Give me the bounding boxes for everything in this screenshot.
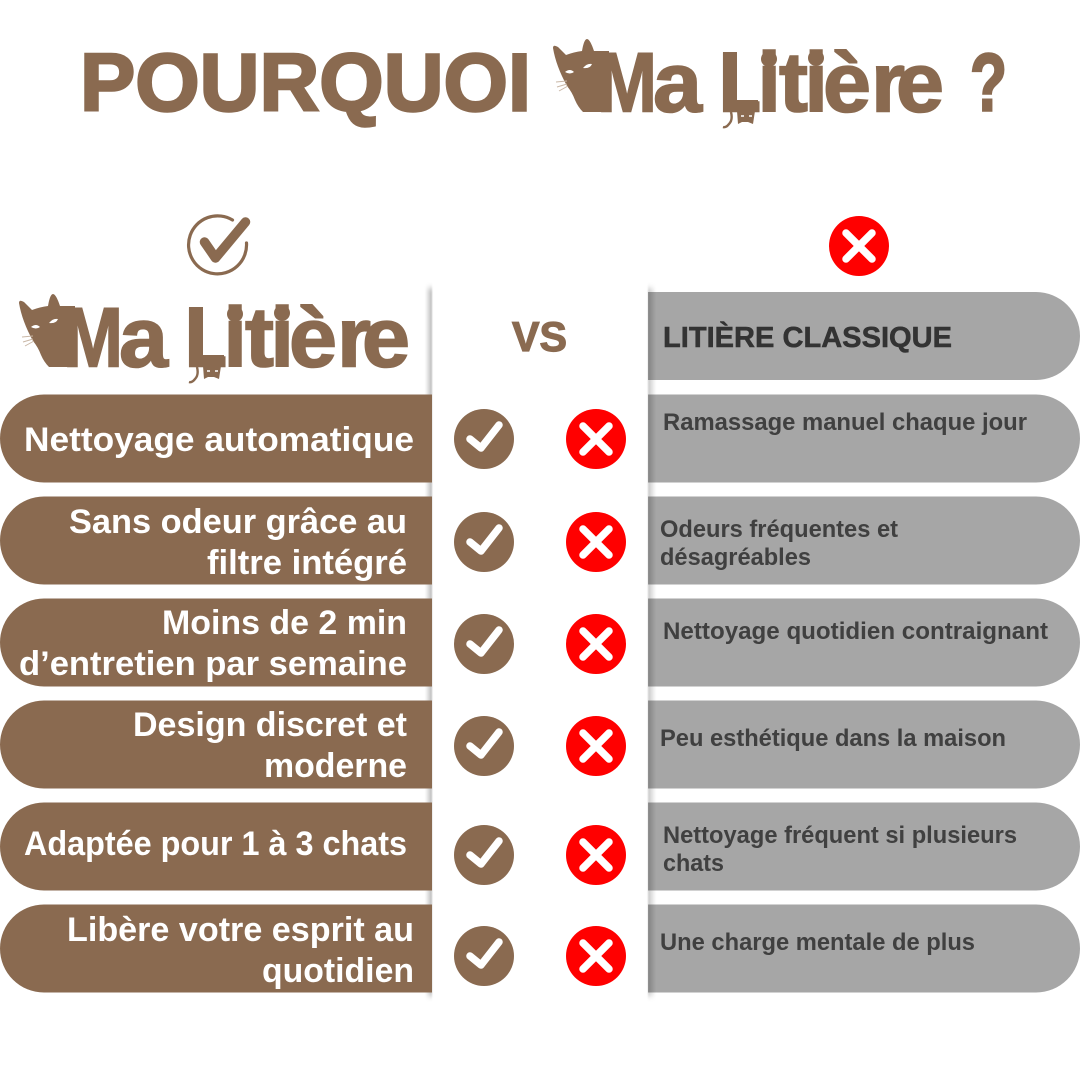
title: ?: [970, 38, 1007, 129]
panel: classic litter header: LITIÈRE CLASSIQUE: [663, 320, 952, 354]
drawback 1: [648, 394, 1080, 482]
logo: Ma Litière (column): è: [289, 290, 337, 384]
cross icon 2: [566, 512, 626, 572]
row 5: [0, 802, 1080, 890]
right column shadow: [648, 288, 656, 996]
logo: Ma Litière (column): M: [63, 290, 123, 384]
cross icon 1: [566, 409, 626, 469]
drawback 5: chats: [663, 850, 724, 877]
logo: Ma Litière (title): M: [597, 35, 657, 129]
row 3: [0, 598, 1080, 686]
advantage 3: Moins de 2 min: [162, 604, 407, 642]
advantage 4: moderne: [264, 747, 407, 785]
advantage 4: [0, 700, 432, 788]
logo: Ma Litière (column): i: [270, 290, 294, 384]
title: POURQUOI: [80, 38, 531, 129]
logo: Ma Litière (column): e: [362, 290, 410, 384]
check icon 4: [454, 716, 514, 776]
advantage 3: [0, 598, 432, 686]
panel: classic litter header: [648, 292, 1080, 380]
cross icon 3: [566, 614, 626, 674]
logo: Ma Litière (column): L: [185, 290, 227, 384]
drawback 3: Nettoyage quotidien contraignant: [663, 618, 1048, 645]
check icon 2: [454, 512, 514, 572]
drawback 6: [648, 904, 1080, 992]
advantage 5: [0, 802, 432, 890]
left column shadow: [425, 288, 432, 996]
logo: Ma Litière (title): è: [823, 35, 871, 129]
advantage 6: [0, 904, 432, 992]
cross icon 5: [566, 825, 626, 885]
check icon 3: [454, 614, 514, 674]
icon: red cross header: [829, 216, 889, 276]
logo: Ma Litière (title): i: [758, 35, 781, 129]
cross icon 4: [566, 716, 626, 776]
check icon 5: [454, 825, 514, 885]
logo: Ma Litière (title): r: [871, 35, 905, 129]
drawback 4: [648, 700, 1080, 788]
logo: Ma Litière (column): a: [119, 290, 169, 384]
logo: Ma Litière (title): t: [779, 35, 808, 129]
icon: check outline: [189, 216, 247, 274]
advantage 1: [0, 394, 432, 482]
logo: Ma Litière (title): e: [896, 35, 944, 129]
row 6: [0, 904, 1080, 992]
advantage 6: Libère votre esprit au: [67, 911, 414, 949]
row 1: [0, 394, 1080, 482]
drawback 6: Une charge mentale de plus: [660, 929, 975, 956]
advantage 1: Nettoyage automatique: [24, 421, 414, 459]
drawback 5: [648, 802, 1080, 890]
advantage 3: d’entretien par semaine: [19, 645, 407, 683]
advantage 4: Design discret et: [133, 706, 407, 744]
drawback 2: [648, 496, 1080, 584]
advantage 2: Sans odeur grâce au: [69, 503, 407, 541]
advantage 6: quotidien: [262, 952, 414, 990]
drawback 3: [648, 598, 1080, 686]
check icon 1: [454, 409, 514, 469]
advantage 2: filtre intégré: [207, 544, 407, 582]
advantage 5: Adaptée pour 1 à 3 chats: [24, 825, 407, 863]
row 4: [0, 700, 1080, 788]
drawback 2: désagréables: [660, 544, 811, 571]
vs label: VS: [512, 313, 567, 360]
logo: Ma Litière (title): L: [719, 35, 761, 129]
logo: Ma Litière (column): r: [337, 290, 371, 384]
logo: Ma Litière (title): i: [804, 35, 828, 129]
title: [80, 35, 1007, 129]
logo: Ma Litière (title): a: [653, 35, 703, 129]
cross icon 6: [566, 926, 626, 986]
logo: Ma Litière (column): t: [245, 290, 274, 384]
logo: Ma Litière (column): i: [224, 290, 247, 384]
advantage 2: [0, 496, 432, 584]
row 2: [0, 496, 1080, 584]
drawback 5: Nettoyage fréquent si plusieurs: [663, 822, 1017, 849]
drawback 1: Ramassage manuel chaque jour: [663, 409, 1027, 436]
drawback 4: Peu esthétique dans la maison: [660, 725, 1006, 752]
logo: Ma Litière (column): [19, 290, 410, 384]
logo: Ma Litière (title): [553, 35, 944, 129]
check icon 6: [454, 926, 514, 986]
drawback 2: Odeurs fréquentes et: [660, 516, 898, 543]
